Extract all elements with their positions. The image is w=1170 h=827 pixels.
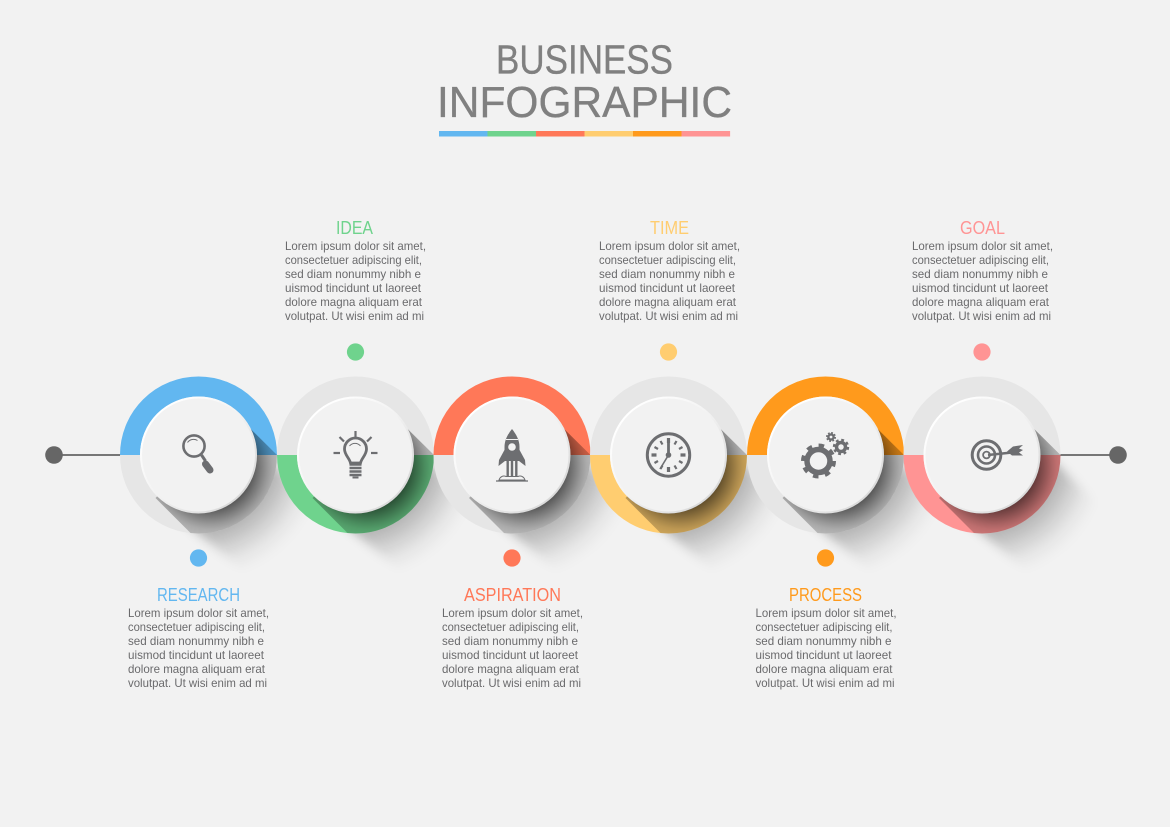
text block: process: uismod tincidunt ut laoreet: [756, 648, 892, 662]
text block: goal: dolore magna aliquam erat: [912, 295, 1050, 309]
text block: time: TIME: [650, 218, 689, 238]
text block: research: RESEARCH: [157, 585, 240, 605]
text block: goal: GOAL: [960, 218, 1005, 238]
text block: aspiration: [442, 585, 583, 690]
icon: rocket: [496, 429, 528, 481]
step 2 circle: idea: [277, 376, 456, 561]
text block: process: PROCESS: [789, 585, 862, 605]
text block: process: dolore magna aliquam erat: [756, 662, 893, 676]
title: INFOGRAPHIC: [437, 78, 732, 127]
text block: research: sed diam nonummy nibh e: [128, 634, 264, 648]
text block: process: consectetuer adipiscing elit,: [756, 620, 892, 634]
icon: magnifying glass: [183, 435, 210, 470]
marker dots: [190, 343, 991, 567]
text block: aspiration: Lorem ipsum dolor sit amet,: [442, 606, 583, 620]
text block: research: uismod tincidunt ut laoreet: [128, 648, 265, 662]
text block: goal: sed diam nonummy nibh e: [912, 267, 1048, 281]
text block: aspiration: volutpat. Ut wisi enim ad mi: [442, 676, 581, 690]
text block: goal: uismod tincidunt ut laoreet: [912, 281, 1049, 295]
right end connector: [1059, 446, 1127, 464]
text block: aspiration: uismod tincidunt ut laoreet: [442, 648, 579, 662]
text block: process: volutpat. Ut wisi enim ad mi: [756, 676, 894, 690]
text block: research: [128, 585, 269, 690]
text block: process: sed diam nonummy nibh e: [756, 634, 892, 648]
step 6 circle: goal: [904, 376, 1086, 561]
icon: light bulb: [334, 431, 378, 478]
text block: idea: Lorem ipsum dolor sit amet,: [285, 239, 426, 253]
title: BUSINESS: [496, 36, 673, 82]
text block: time: consectetuer adipiscing elit,: [599, 253, 736, 267]
step 3 circle: aspiration: [434, 376, 612, 561]
text block: time: [599, 218, 740, 323]
text block: research: dolore magna aliquam erat: [128, 662, 266, 676]
text block: process: [756, 585, 896, 690]
text block: research: volutpat. Ut wisi enim ad mi: [128, 676, 267, 690]
step 5 circle: process: [747, 376, 926, 561]
text block: goal: volutpat. Ut wisi enim ad mi: [912, 309, 1051, 323]
text block: idea: sed diam nonummy nibh e: [285, 267, 421, 281]
text block: process: Lorem ipsum dolor sit amet,: [756, 606, 896, 620]
title: [437, 36, 732, 127]
text block: goal: [912, 218, 1053, 323]
text block: time: Lorem ipsum dolor sit amet,: [599, 239, 740, 253]
title colour bar: [439, 131, 730, 136]
text block: goal: consectetuer adipiscing elit,: [912, 253, 1049, 267]
icon: gears: [803, 433, 848, 476]
text block: aspiration: ASPIRATION: [464, 585, 561, 605]
text block: idea: IDEA: [336, 218, 373, 238]
text block: goal: Lorem ipsum dolor sit amet,: [912, 239, 1053, 253]
step 4 circle: time: [590, 376, 769, 561]
text block: idea: dolore magna aliquam erat: [285, 295, 423, 309]
text block: idea: [285, 218, 426, 323]
text block: time: sed diam nonummy nibh e: [599, 267, 735, 281]
text block: time: dolore magna aliquam erat: [599, 295, 737, 309]
step 1 circle: research: [120, 376, 299, 561]
icon: clock: [647, 434, 690, 476]
text block: research: Lorem ipsum dolor sit amet,: [128, 606, 269, 620]
text block: time: uismod tincidunt ut laoreet: [599, 281, 736, 295]
text block: aspiration: sed diam nonummy nibh e: [442, 634, 578, 648]
text block: aspiration: consectetuer adipiscing elit,: [442, 620, 579, 634]
text block: idea: volutpat. Ut wisi enim ad mi: [285, 309, 424, 323]
icon: target with arrow: [972, 441, 1023, 469]
left end connector: [45, 446, 121, 464]
text block: time: volutpat. Ut wisi enim ad mi: [599, 309, 738, 323]
text block: research: consectetuer adipiscing elit,: [128, 620, 265, 634]
text block: aspiration: dolore magna aliquam erat: [442, 662, 580, 676]
text block: idea: consectetuer adipiscing elit,: [285, 253, 422, 267]
text block: idea: uismod tincidunt ut laoreet: [285, 281, 422, 295]
